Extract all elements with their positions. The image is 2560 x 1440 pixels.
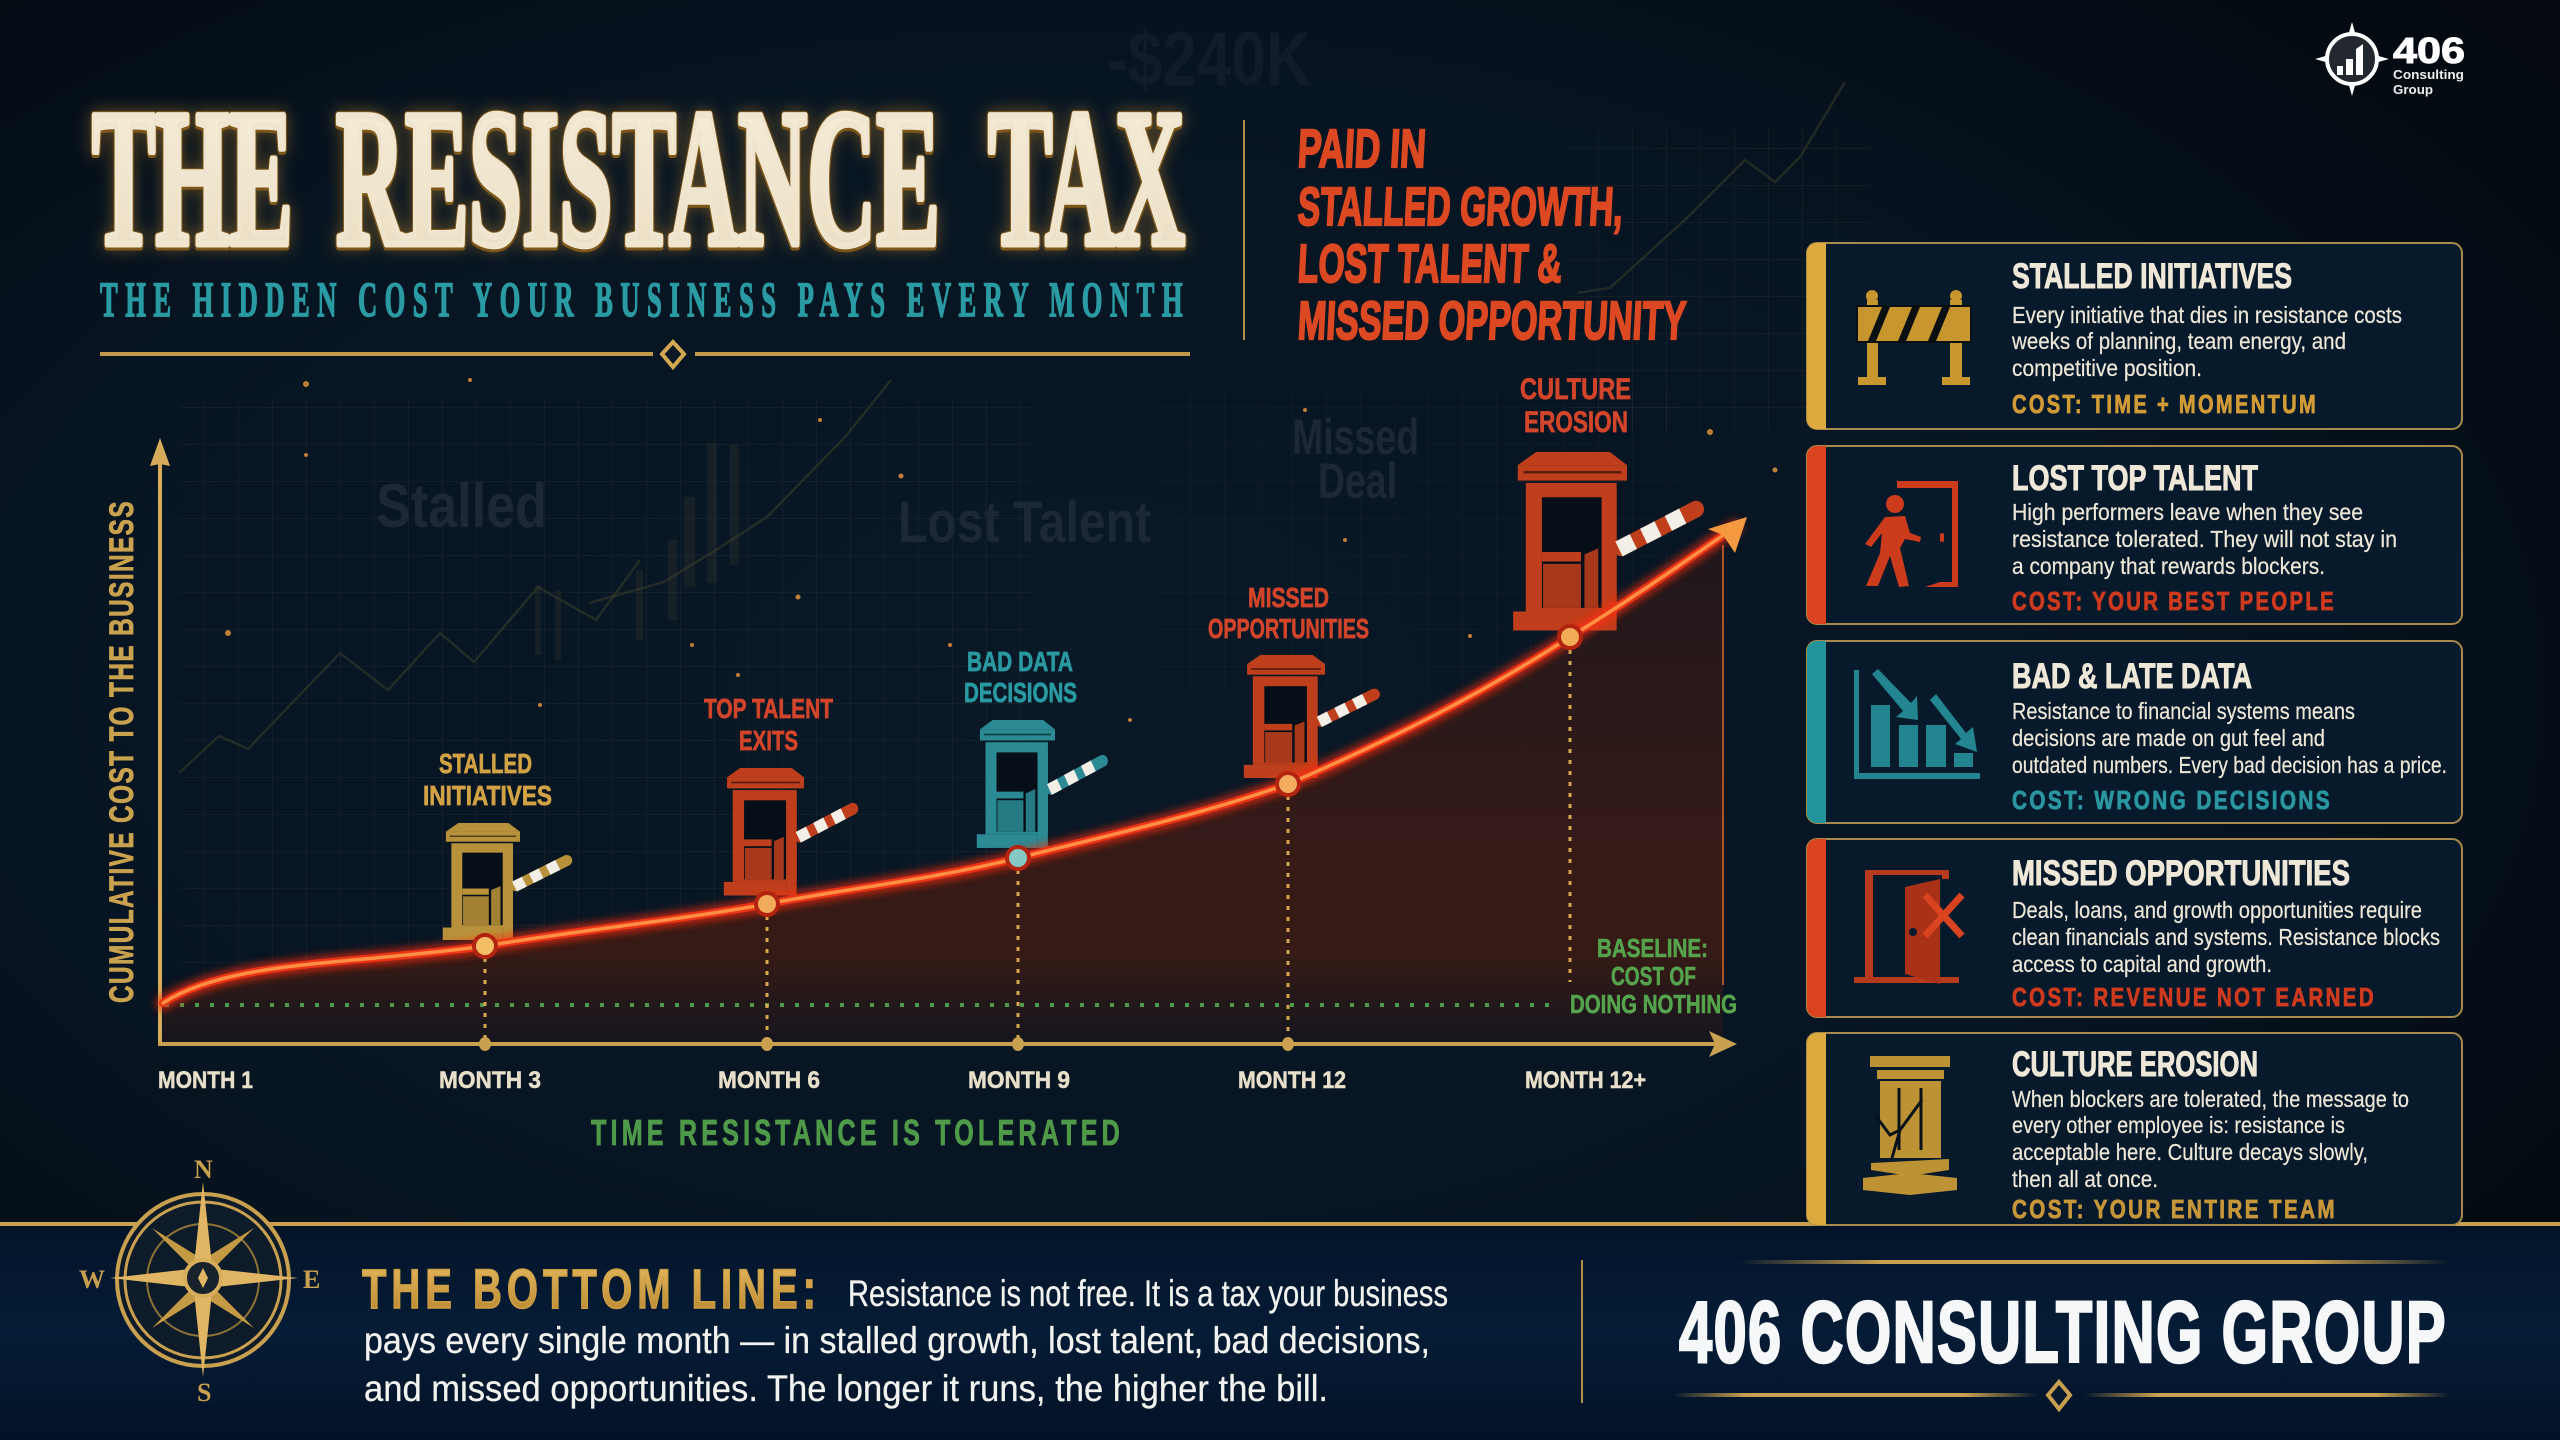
y axis: [150, 438, 170, 1046]
card cost: COST: REVENUE NOT EARNED: [2012, 982, 2376, 1012]
logo: Consulting: [2393, 67, 2464, 82]
card body: every other employee is: resistance is: [2012, 1112, 2345, 1138]
card body: acceptable here. Culture decays slowly,: [2012, 1139, 2368, 1165]
x axis title: TIME RESISTANCE IS TOLERATED: [591, 1112, 1124, 1153]
card body: weeks of planning, team energy, and: [2011, 328, 2346, 354]
icon: compass rose: [79, 1155, 320, 1407]
title: RESISTANCE: [336, 70, 940, 287]
card cost: COST: TIME + MOMENTUM: [2012, 389, 2318, 419]
baseline label: DOING NOTHING: [1570, 989, 1737, 1019]
tagline: LOST TALENT &: [1296, 234, 1564, 294]
icon: blocked door: [1854, 870, 1962, 984]
baseline label: COST OF: [1611, 961, 1696, 991]
card body: [2012, 499, 2397, 579]
icon: compass rose: W: [79, 1265, 105, 1294]
y axis title: CUMULATIVE COST TO THE BUSINESS: [103, 500, 141, 1003]
subtitle: THE HIDDEN COST YOUR BUSINESS PAYS EVERY MONTH: [100, 271, 1190, 327]
month labels: [158, 1067, 1646, 1094]
bottom line message: THE BOTTOM LINE:: [362, 1257, 821, 1320]
card body: a company that rewards blockers.: [2012, 553, 2325, 579]
card body: decisions are made on gut feel and: [2012, 725, 2325, 751]
milestone label: top talent exits: [704, 693, 833, 756]
month labels: MONTH 12: [1238, 1067, 1346, 1094]
booth: stalled initiatives: [443, 823, 567, 940]
bottom line message: [362, 1257, 1448, 1409]
tagline: MISSED OPPORTUNITY: [1296, 291, 1688, 351]
booth: bad data decisions: [977, 720, 1102, 848]
ghost words: Missed: [1292, 409, 1419, 465]
infographic canvas: TAX: [988, 70, 1185, 287]
card heading: STALLED INITIATIVES: [2012, 257, 2292, 296]
card heading: BAD & LATE DATA: [2012, 657, 2252, 696]
booth: missed opportunities: [1244, 655, 1374, 778]
bottom divider: [1581, 1260, 1583, 1403]
panel: bad and late data: [1807, 641, 2462, 823]
milestone label: bad data decisions: DECISIONS: [964, 677, 1077, 708]
ghost words: Lost Talent: [898, 490, 1151, 555]
card heading: LOST TOP TALENT: [2012, 459, 2258, 498]
card cost: COST: WRONG DECISIONS: [2012, 785, 2332, 815]
title: THE: [92, 70, 293, 287]
milestone label: top talent exits: EXITS: [739, 725, 798, 756]
ghost words: -$240K: [1107, 17, 1311, 102]
milestone label: bad data decisions: BAD DATA: [967, 646, 1073, 677]
card body: [2012, 698, 2447, 778]
logo: Group: [2393, 82, 2433, 97]
icon: compass rose: E: [303, 1265, 320, 1294]
card body: competitive position.: [2012, 355, 2202, 381]
area under curve: [163, 535, 1723, 1044]
card body: High performers leave when they see: [2012, 499, 2363, 525]
milestone label: top talent exits: TOP TALENT: [704, 693, 833, 724]
milestone label: stalled initiatives: STALLED: [439, 748, 532, 779]
panel: missed opportunities: [1807, 839, 2462, 1017]
card body: [2011, 302, 2402, 381]
milestone label: stalled initiatives: [423, 748, 552, 811]
milestone label: stalled initiatives: INITIATIVES: [423, 780, 552, 811]
sparks: [225, 378, 1778, 902]
title: [92, 70, 1185, 288]
brand name: [1673, 1260, 2450, 1409]
card heading: CULTURE EROSION: [2012, 1045, 2258, 1084]
card body: [2012, 897, 2440, 977]
milestone label: missed opportunities: MISSED: [1248, 582, 1329, 613]
milestone label: missed opportunities: [1208, 582, 1369, 644]
tagline: [1296, 119, 1688, 351]
panel: culture erosion: [1807, 1033, 2462, 1225]
bottom panel: [0, 1224, 2560, 1440]
ghost words: Deal: [1318, 453, 1397, 509]
card body: then all at once.: [2012, 1166, 2158, 1192]
card body: Deals, loans, and growth opportunities require: [2012, 897, 2422, 923]
milestone label: culture erosion: CULTURE: [1520, 373, 1631, 406]
curve arrowhead: [1708, 517, 1747, 553]
month labels: MONTH 3: [439, 1067, 541, 1094]
ghost words: Stalled: [376, 472, 547, 541]
card body: clean financials and systems. Resistance blocks: [2012, 924, 2440, 950]
title: THE: [92, 71, 293, 288]
baseline label: [1570, 933, 1737, 1019]
background grid texture: [180, 130, 1870, 1040]
logo: [2315, 22, 2465, 97]
booth: culture erosion: [1513, 452, 1696, 630]
panel: stalled initiatives: [1807, 243, 2462, 429]
baseline dotted line: [165, 1003, 1552, 1007]
month labels: MONTH 9: [968, 1067, 1070, 1094]
ghost candlesticks: [535, 443, 739, 660]
milestone label: bad data decisions: [964, 646, 1077, 708]
icon: compass rose: S: [197, 1378, 211, 1407]
title divider: [100, 342, 1190, 367]
curve markers: [474, 626, 1581, 957]
infographic canvas: TAX: [988, 71, 1185, 288]
month labels: MONTH 12+: [1525, 1067, 1646, 1094]
card cost: COST: YOUR ENTIRE TEAM: [2012, 1194, 2337, 1224]
card body: Every initiative that dies in resistance costs: [2012, 302, 2402, 328]
card body: outdated numbers. Every bad decision has a price.: [2012, 752, 2447, 778]
bottom line message: Resistance is not free. It is a tax your business: [848, 1273, 1448, 1314]
gold rule: [0, 1222, 2560, 1226]
booth: top talent exits: [724, 768, 853, 896]
bottom line message: pays every single month — in stalled growth, lost talent, bad decisions,: [364, 1320, 1430, 1361]
milestone label: culture erosion: [1520, 373, 1631, 439]
infographic canvas: TAX: [988, 70, 1185, 287]
title: THE: [92, 70, 293, 287]
icon: compass rose: N: [194, 1155, 213, 1184]
x axis: [158, 1031, 1737, 1057]
tagline: PAID IN: [1296, 119, 1428, 179]
vertical header divider: [1243, 120, 1245, 340]
milestone label: missed opportunities: OPPORTUNITIES: [1208, 613, 1369, 644]
cost curve: [163, 527, 1735, 1003]
icon: falling bar chart: [1854, 669, 1980, 779]
right edge of area: [1722, 545, 1724, 985]
logo: 406: [2393, 30, 2465, 71]
card body: [2012, 1086, 2409, 1192]
month labels: MONTH 1: [158, 1067, 253, 1094]
title: RESISTANCE: [336, 71, 940, 288]
card body: When blockers are tolerated, the message to: [2012, 1086, 2409, 1112]
milestone label: culture erosion: EROSION: [1524, 406, 1628, 439]
card body: Resistance to financial systems means: [2012, 698, 2355, 724]
card heading: MISSED OPPORTUNITIES: [2012, 854, 2350, 893]
bottom line message: and missed opportunities. The longer it runs, the higher the bill.: [364, 1368, 1328, 1409]
drop lines: [485, 650, 1570, 1040]
ghost trend line: [179, 82, 1845, 773]
ghost words: [376, 17, 1419, 555]
baseline label: BASELINE:: [1597, 933, 1708, 963]
icon: cracked pillar: [1863, 1056, 1957, 1195]
chart: [103, 373, 1747, 1153]
panel: lost top talent: [1807, 446, 2462, 624]
month labels: MONTH 6: [718, 1067, 820, 1094]
icon: barricade: [1857, 290, 1971, 385]
icon: person exiting door: [1865, 481, 1958, 587]
card body: access to capital and growth.: [2012, 951, 2272, 977]
card cost: COST: YOUR BEST PEOPLE: [2012, 586, 2336, 616]
title: RESISTANCE: [336, 70, 940, 287]
tagline: STALLED GROWTH,: [1296, 177, 1625, 237]
card body: resistance tolerated. They will not stay in: [2012, 526, 2397, 552]
